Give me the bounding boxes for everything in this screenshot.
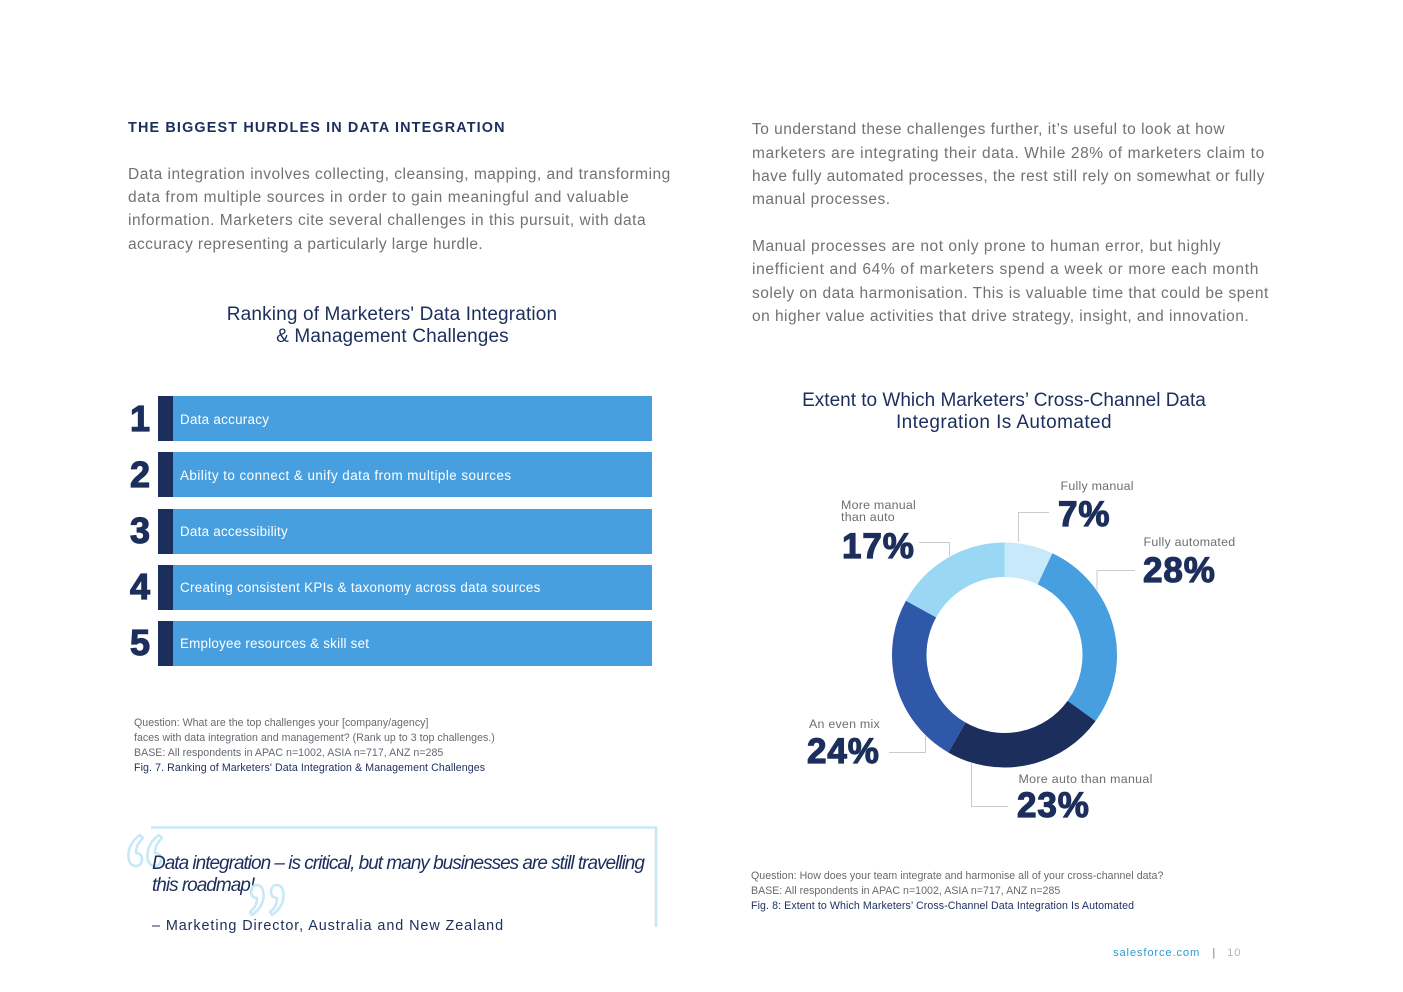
segment: fully automated 28%: [1045, 569, 1100, 711]
label: an even mix: An even mix: [809, 717, 880, 731]
quote text: this roadmap!: [152, 875, 254, 896]
source note: figure 7: Fig. 7. Ranking of Marketers' Data Integration & Management Challenges: [134, 762, 485, 774]
bar 3: [158, 509, 652, 554]
text block: understanding challenges: manual processes.: [752, 191, 891, 208]
text block: understanding challenges: [752, 121, 1269, 325]
label: more manual than auto: [841, 498, 916, 566]
bar 1: Data accuracy: [180, 412, 269, 427]
label: more manual than auto: More manual: [841, 498, 916, 512]
icon: closing quote mark: [249, 884, 285, 916]
footer: site and page number: salesforce.com | 10: [1113, 947, 1241, 959]
label: fully manual: Fully manual: [1060, 479, 1134, 493]
rank 2: 2: [130, 454, 150, 495]
text block: understanding challenges: Manual processes are not only prone to human error, but highly: [752, 238, 1221, 255]
bar 3: Data accessibility: [180, 524, 288, 539]
text block: understanding challenges: have fully automated processes, the rest still rely on somewhat or fully: [752, 168, 1265, 185]
label: more manual than auto: 17%: [842, 527, 915, 566]
rank 3: 3: [130, 510, 150, 551]
source note: figure 8: BASE: All respondents in APAC n=1002, ASIA n=717, ANZ n=285: [751, 885, 1060, 897]
source note: figure 7: BASE: All respondents in APAC n=1002, ASIA n=717, ANZ n=285: [134, 747, 443, 759]
chart title: automation: Extent to Which Marketers’ Cross-Channel Data: [802, 390, 1206, 411]
label: fully automated: [1143, 535, 1235, 590]
source note: figure 7: Question: What are the top challenges your [company/agency]: [134, 717, 428, 729]
label: fully manual: 7%: [1058, 495, 1110, 534]
quote text: Data integration – is critical, but many businesses are still travelling: [152, 853, 644, 874]
segment: more auto than manual 23%: [957, 711, 1082, 750]
rank 5: 5: [130, 622, 150, 663]
text block: understanding challenges: on higher value activities that drive strategy, insight, and innovation.: [752, 308, 1249, 325]
label: more auto than manual: [1017, 772, 1153, 825]
quote frame: [151, 826, 658, 927]
label: fully manual: [1058, 479, 1134, 534]
rank 1: 1: [130, 398, 150, 439]
leader lines: [889, 512, 1135, 806]
rank 4: 4: [130, 566, 150, 607]
chart title: ranking: & Management Challenges: [276, 326, 509, 347]
callout: quote: [127, 826, 658, 934]
chart title: automation: [802, 390, 1206, 433]
text block: data integration intro: accuracy representing a particularly large hurdle.: [128, 236, 483, 253]
bar 4: Creating consistent KPIs & taxonomy across data sources: [180, 580, 541, 595]
label: fully automated: Fully automated: [1144, 535, 1235, 549]
source note: figure 8: Fig. 8: Extent to Which Marketers’ Cross-Channel Data Integration Is Automated: [751, 900, 1134, 912]
text block: understanding challenges: To understand these challenges further, it’s useful to look at how: [752, 121, 1225, 138]
source note: figure 8: Question: How does your team integrate and harmonise all of your cross-channel data?: [751, 870, 1163, 882]
source note: figure 7: [134, 717, 495, 774]
text block: understanding challenges: marketers are integrating their data. While 28% of marketers claim to: [752, 145, 1265, 162]
chart title: ranking: Ranking of Marketers' Data Integration: [227, 304, 557, 325]
segment: even mix 24%: [909, 609, 957, 738]
quote attribution: – Marketing Director, Australia and New Zealand: [152, 918, 504, 934]
chart: ranked challenges: [130, 396, 652, 666]
text block: data integration intro: data from multiple sources in order to gain meaningful and valuable: [128, 189, 629, 206]
quote text: [152, 853, 645, 896]
text block: data integration intro: Data integration involves collecting, cleansing, mapping, and transforming: [128, 166, 671, 183]
bar 5: [158, 621, 652, 666]
bar 1: [158, 396, 652, 441]
text block: understanding challenges: inefficient and 64% of marketers spend a week or more each month: [752, 261, 1259, 278]
bar 2: [158, 452, 652, 497]
label: fully automated: 28%: [1143, 551, 1216, 590]
bar 5: Employee resources & skill set: [180, 636, 369, 651]
text block: data integration intro: information. Marketers cite several challenges in this pursuit, with data: [128, 212, 646, 229]
chart title: ranking: [227, 304, 557, 347]
label: more auto than manual: More auto than manual: [1018, 772, 1153, 786]
bar 2: Ability to connect & unify data from multiple sources: [180, 468, 512, 483]
icon: opening quote mark: [127, 834, 164, 868]
chart title: automation: Integration Is Automated: [896, 412, 1112, 433]
segment: more manual than auto 17%: [921, 560, 1004, 609]
label: more auto than manual: 23%: [1017, 786, 1090, 825]
heading: biggest hurdles: THE BIGGEST HURDLES IN DATA INTEGRATION: [128, 120, 506, 136]
text block: understanding challenges: solely on data harmonisation. This is valuable time that could be spent: [752, 285, 1269, 302]
segment: fully manual 7%: [1004, 560, 1045, 569]
source note: figure 8: [751, 870, 1163, 912]
label: more manual than auto: than auto: [841, 510, 895, 524]
label: an even mix: 24%: [807, 732, 880, 771]
bar 4: [158, 565, 652, 610]
text block: data integration intro: [128, 166, 671, 253]
source note: figure 7: faces with data integration and management? (Rank up to 3 top challenges.): [134, 732, 495, 744]
